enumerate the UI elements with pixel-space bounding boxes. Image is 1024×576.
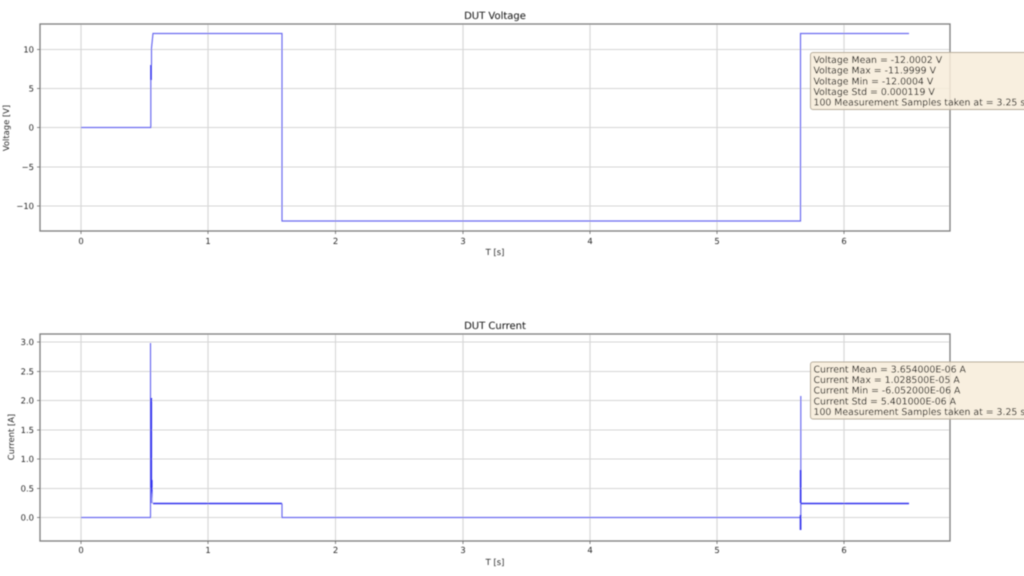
- current y-axis tick labels: 1.5: [21, 425, 34, 435]
- current y-axis tick labels: 2.0: [21, 396, 34, 406]
- current y-axis tick labels: 2.5: [21, 366, 34, 376]
- voltage y-axis tick labels: −5: [22, 162, 34, 172]
- current x-axis tick labels: 2: [333, 545, 338, 555]
- current x-axis tick labels: 0: [78, 545, 84, 555]
- voltage x-axis tick labels: [78, 231, 847, 246]
- current x-axis label: T [s]: [485, 557, 504, 567]
- callout: voltage statistics: [810, 52, 1024, 110]
- voltage y-axis label: Voltage [V]: [1, 105, 11, 151]
- callout: voltage statistics: Voltage Max = -11.9999 V: [814, 66, 937, 76]
- voltage y-axis tick labels: 10: [23, 44, 34, 54]
- panel: DUT Current chart: [6, 321, 1024, 567]
- current y-axis tick labels: 3.0: [21, 337, 34, 347]
- current chart grid: [40, 334, 950, 541]
- voltage y-axis tick labels: [16, 44, 40, 211]
- heading: DUT Current: DUT Current: [464, 321, 526, 332]
- current x-axis tick labels: 4: [587, 545, 593, 555]
- voltage chart grid: [40, 24, 950, 231]
- callout: current statistics: Current Std = 5.401000E-06 A: [814, 396, 957, 408]
- current trace: [81, 343, 909, 530]
- voltage x-axis tick labels: 3: [460, 236, 466, 246]
- current y-axis label: Current [A]: [6, 414, 16, 460]
- voltage x-axis label: T [s]: [485, 247, 504, 257]
- callout: current statistics: [810, 362, 1024, 419]
- callout: current statistics: Current Mean = 3.654000E-06 A: [814, 364, 967, 376]
- voltage y-axis tick labels: −10: [16, 201, 34, 211]
- voltage x-axis tick labels: 0: [78, 236, 84, 246]
- voltage y-axis tick labels: 5: [29, 84, 34, 94]
- panel: DUT Voltage chart: [1, 11, 1024, 257]
- voltage axes frame: [40, 24, 950, 231]
- current x-axis tick labels: 1: [205, 545, 211, 555]
- voltage x-axis tick labels: 5: [714, 236, 720, 246]
- callout: voltage statistics: 100 Measurement Samples taken at = 3.25 s: [814, 98, 1024, 108]
- current y-axis tick labels: 0.0: [21, 512, 34, 522]
- voltage x-axis tick labels: 2: [333, 236, 338, 246]
- current x-axis tick labels: 6: [841, 545, 847, 555]
- callout: current statistics: Current Min = -6.052000E-06 A: [814, 386, 961, 396]
- callout: current statistics: Current Max = 1.028500E-05 A: [814, 375, 960, 386]
- voltage trace: [81, 34, 909, 221]
- callout: voltage statistics: Voltage Min = -12.0004 V: [814, 76, 934, 88]
- current x-axis tick labels: 5: [714, 545, 720, 555]
- callout: current statistics: 100 Measurement Samples taken at = 3.25 s: [814, 407, 1024, 418]
- voltage x-axis tick labels: 1: [205, 236, 211, 246]
- current axes frame: [40, 334, 950, 541]
- heading: DUT Voltage: DUT Voltage: [464, 11, 526, 22]
- current x-axis tick labels: 3: [460, 545, 466, 555]
- callout: voltage statistics: Voltage Std = 0.000119 V: [814, 87, 935, 98]
- callout: voltage statistics: Voltage Mean = -12.0002 V: [814, 55, 943, 66]
- current y-axis tick labels: [21, 337, 40, 522]
- current x-axis tick labels: [78, 541, 847, 555]
- voltage x-axis tick labels: 4: [587, 236, 593, 246]
- current y-axis tick labels: 1.0: [21, 454, 34, 464]
- current y-axis tick labels: 0.5: [21, 484, 34, 494]
- voltage x-axis tick labels: 6: [841, 236, 847, 246]
- voltage y-axis tick labels: 0: [29, 122, 34, 132]
